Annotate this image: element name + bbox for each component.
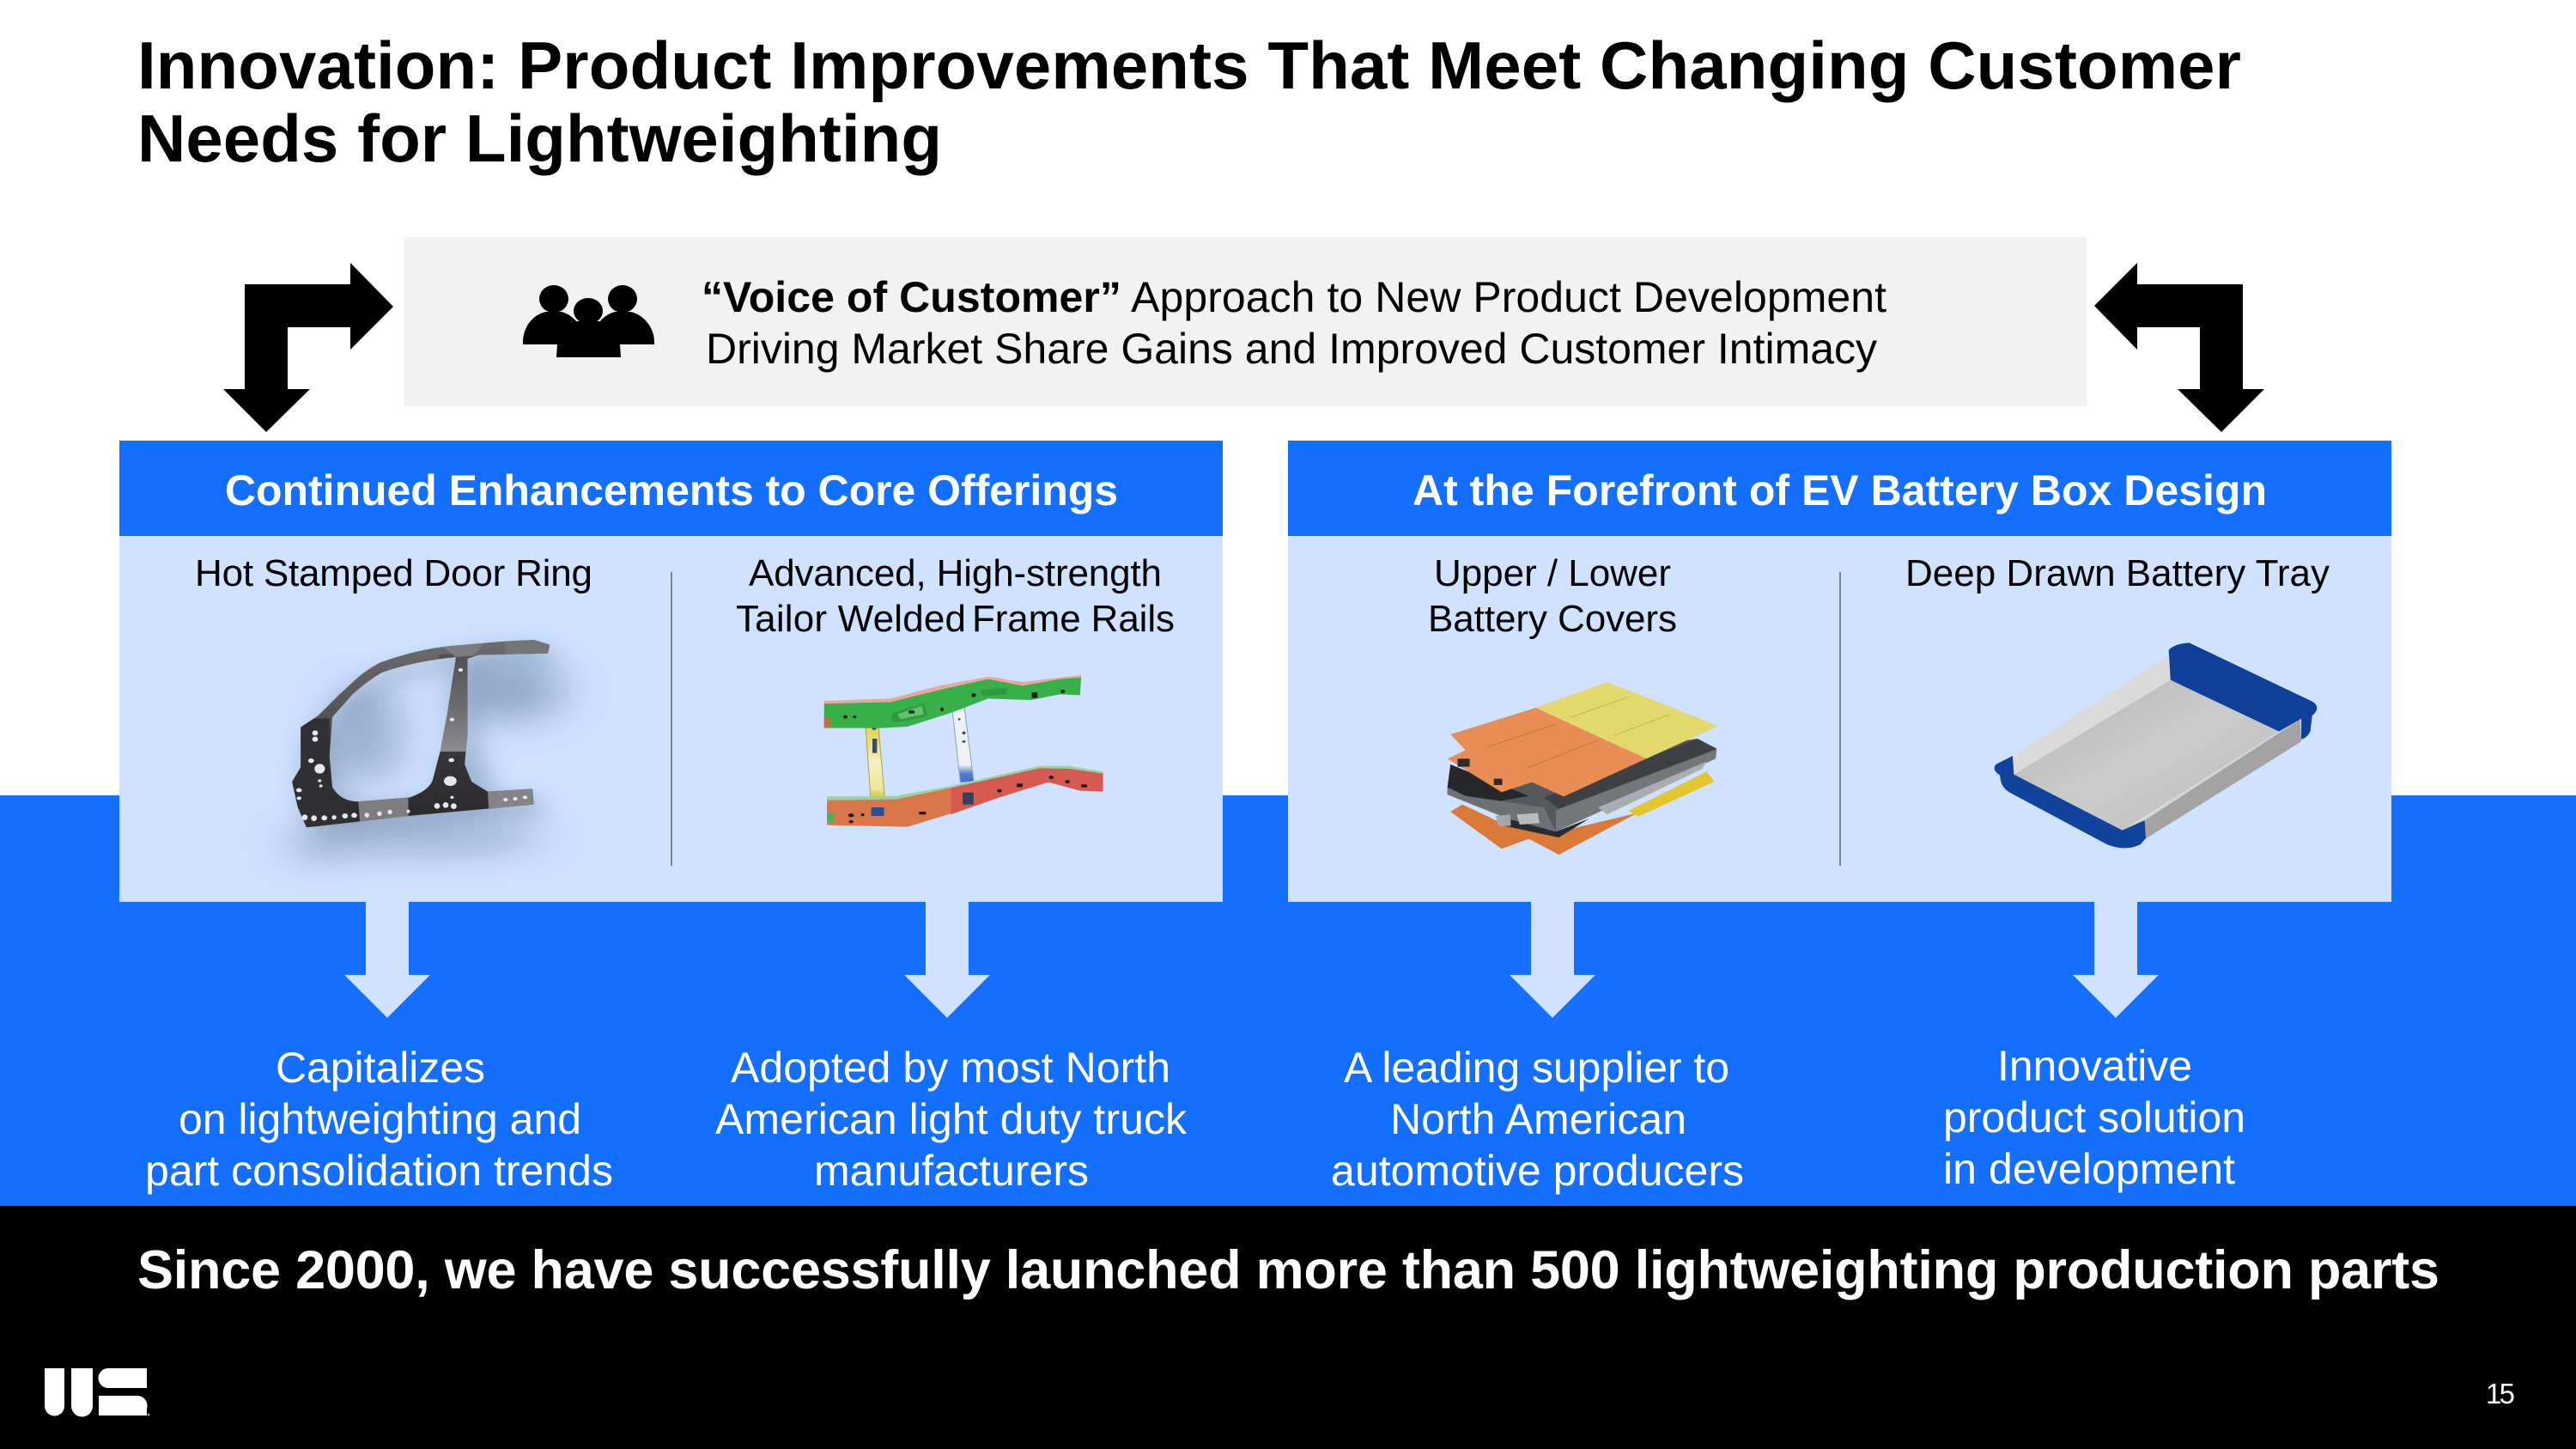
callout: voice of customer bbox=[404, 237, 2087, 406]
title: Needs for Lightweighting bbox=[137, 100, 942, 176]
callout text: “Voice of Customer” Approach to New Product Development bbox=[702, 273, 1886, 321]
label: battery covers: Upper / Lower bbox=[1434, 552, 1671, 594]
panel heading bbox=[119, 441, 1223, 536]
panel heading: Continued Enhancements to Core Offerings bbox=[225, 466, 1118, 514]
arrow: right elbow from callout to battery box bbox=[2094, 263, 2264, 432]
panel heading: At the Forefront of EV Battery Box Design bbox=[1413, 466, 2267, 514]
panel: core offerings bbox=[119, 441, 1223, 902]
image: battery covers bbox=[1448, 682, 1718, 855]
text: innovative product solution: in development bbox=[1943, 1145, 2235, 1193]
callout text: Driving Market Share Gains and Improved Customer Intimacy bbox=[706, 325, 1877, 373]
arrow: battery tray benefit bbox=[2073, 902, 2159, 1018]
label: battery tray: Deep Drawn Battery Tray bbox=[1905, 552, 2330, 594]
footer statement: Since 2000, we have successfully launched more than 500 lightweighting production parts bbox=[137, 1240, 2439, 1300]
image: battery tray bbox=[1995, 642, 2317, 848]
label: frame rails: Advanced, High-strength bbox=[749, 552, 1162, 594]
label: frame rails: Tailor Welded bbox=[736, 598, 966, 640]
text: innovative product solution bbox=[1943, 1042, 2245, 1193]
black footer band bbox=[0, 1206, 2576, 1449]
image: frame rails bbox=[824, 675, 1103, 827]
label: hot stamped door ring: Hot Stamped Door Ring bbox=[195, 552, 592, 594]
text: adopted by most North American: Adopted by most North bbox=[731, 1044, 1170, 1092]
text: leading supplier bbox=[1331, 1044, 1744, 1195]
label: battery covers: Battery Covers bbox=[1428, 598, 1677, 640]
text: leading supplier: automotive producers bbox=[1331, 1147, 1744, 1195]
arrow: frame rails benefit bbox=[904, 902, 990, 1018]
text: capitalizes on lightweighting: Capitalizes bbox=[276, 1044, 485, 1092]
panel heading bbox=[1288, 441, 2391, 536]
text: leading supplier: North American bbox=[1390, 1095, 1686, 1143]
icon: group of people bbox=[523, 285, 654, 357]
text: adopted by most North American: manufacturers bbox=[814, 1147, 1089, 1195]
text: innovative product solution: Innovative bbox=[1997, 1042, 2192, 1090]
title bbox=[137, 27, 2241, 176]
logo bbox=[45, 1368, 149, 1416]
panel: EV battery box bbox=[1288, 441, 2391, 902]
blue background band bbox=[0, 795, 2576, 1206]
text: innovative product solution: product solution bbox=[1943, 1093, 2245, 1142]
arrow: left elbow from callout to core offerings bbox=[223, 263, 393, 432]
arrow: battery covers benefit bbox=[1510, 902, 1595, 1018]
text: adopted by most North American bbox=[715, 1044, 1188, 1195]
text: leading supplier: A leading supplier to bbox=[1344, 1044, 1729, 1092]
text: adopted by most North American: American light duty truck bbox=[715, 1095, 1188, 1143]
label: frame rails bbox=[736, 552, 1175, 640]
page number: 15 bbox=[2486, 1378, 2515, 1409]
label: battery covers bbox=[1428, 552, 1677, 640]
title: Innovation: Product Improvements That Meet Changing Customer bbox=[137, 27, 2241, 103]
callout text bbox=[702, 273, 1886, 373]
text: capitalizes on lightweighting: on lightweighting and bbox=[179, 1095, 581, 1143]
text: capitalizes on lightweighting bbox=[145, 1044, 613, 1195]
arrow: door ring benefit bbox=[344, 902, 430, 1018]
label: frame rails: Frame Rails bbox=[972, 598, 1175, 640]
text: capitalizes on lightweighting: part consolidation trends bbox=[145, 1147, 613, 1195]
image: door ring bbox=[281, 636, 562, 857]
